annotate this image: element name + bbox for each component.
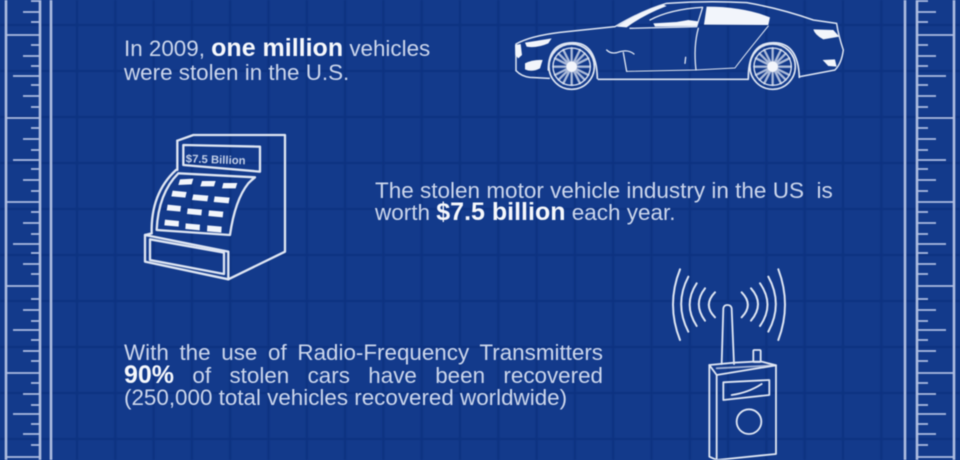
signal waves <box>673 269 785 340</box>
text: industry worth: The stolen motor vehicle industry in the US is <box>375 178 833 203</box>
text: one million vehicles stolen: In 2009, one million vehicles <box>124 34 430 62</box>
text: one million vehicles stolen: were stolen in the U.S. <box>124 60 349 85</box>
text: radio-frequency transmitters: With the use of Radio-Frequency Transmitters <box>124 340 603 365</box>
register display label: $7.5 Billion <box>186 153 246 167</box>
text: radio-frequency transmitters: (250,000 total vehicles recovered worldwide) <box>124 385 567 410</box>
transmitter body <box>709 305 776 460</box>
text: industry worth: worth $7.5 billion each year. <box>375 198 676 226</box>
text: radio-frequency transmitters: 90% of stolen cars have been recovered <box>124 361 603 389</box>
register keys <box>164 179 237 233</box>
